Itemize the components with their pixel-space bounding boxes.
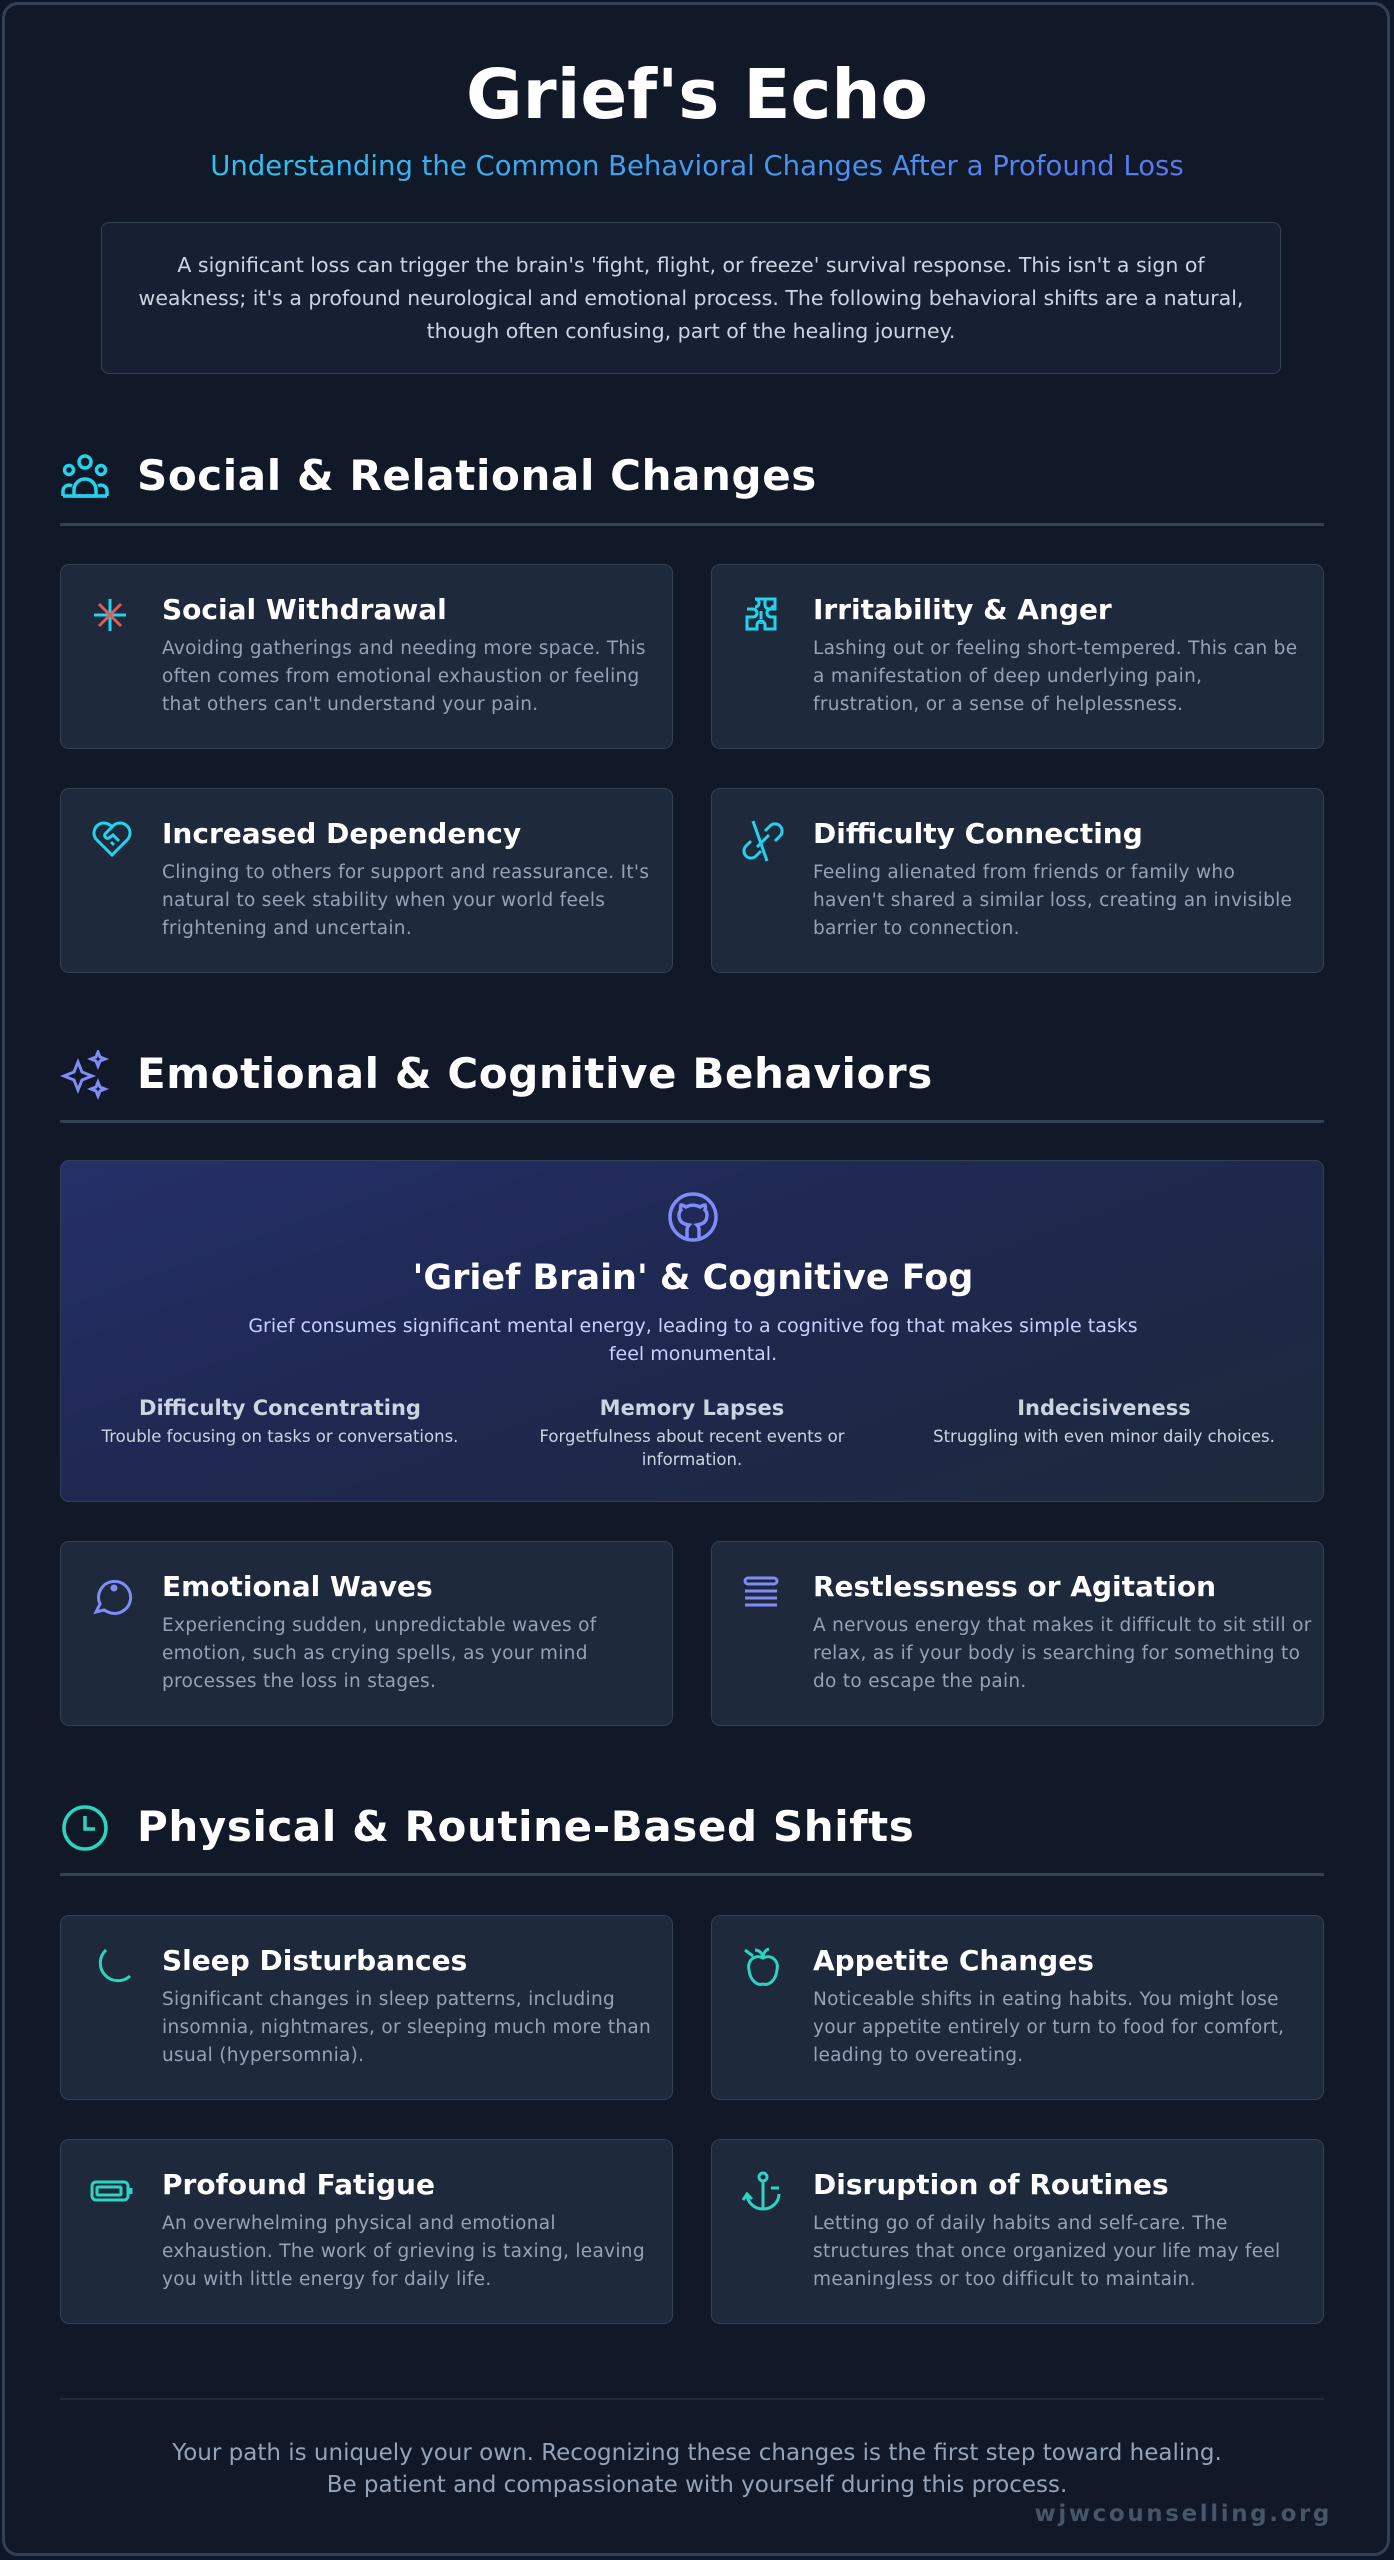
sub-point: indecisiveness: Indecisiveness: [1017, 1396, 1191, 1420]
card: irritability: frustration, or a sense of helplessness.: [813, 694, 1183, 715]
card: routines: Letting go of daily habits and self-care. The: [813, 2213, 1228, 2234]
card: social withdrawal: Avoiding gatherings and needing more space. This: [162, 638, 646, 659]
card: restlessness: relax, as if your body is searching for something to: [813, 1643, 1300, 1664]
card: appetite: leading to overeating.: [813, 2045, 1023, 2066]
icon: asterisk: [94, 599, 126, 631]
card: dependency: natural to seek stability when your world feels: [162, 890, 605, 911]
sub-point: concentrating: Difficulty Concentrating: [139, 1396, 421, 1420]
card: difficulty connecting: Feeling alienated from friends or family who: [813, 862, 1235, 883]
card: sleep: Significant changes in sleep patterns, including: [162, 1989, 615, 2010]
card: sleep: usual (hypersomnia).: [162, 2045, 364, 2066]
card: irritability: Irritability & Anger: [813, 593, 1112, 626]
icon: apple: [744, 1948, 779, 1986]
sub-point: memory: Memory Lapses: [600, 1396, 784, 1420]
card: dependency: Increased Dependency: [162, 817, 521, 850]
footer text: [172, 2440, 1222, 2498]
text: [248, 1315, 1138, 1365]
card: sleep: [60, 1915, 673, 2100]
card: difficulty connecting: haven't shared a similar loss, creating an invisible: [813, 890, 1292, 911]
panel: grief brain: [60, 1160, 1324, 1502]
card: dependency: [60, 788, 673, 973]
card: fatigue: An overwhelming physical and emotional: [162, 2213, 556, 2234]
card: irritability: [711, 564, 1324, 749]
subtitle: Understanding the Common Behavioral Changes After a Profound Loss: [210, 150, 1184, 182]
footer text: Your path is uniquely your own. Recognizing these changes is the first step toward healing.: [172, 2440, 1222, 2466]
icon: drop bubble: [93, 1580, 132, 1615]
card: appetite: your appetite entirely or turn to food for comfort,: [813, 2017, 1284, 2038]
sub-point: indecisiveness: [933, 1396, 1275, 1446]
icon: people: [61, 454, 109, 498]
title: Grief's Echo: [466, 55, 928, 135]
card: sleep: insomnia, nightmares, or sleeping much more than: [162, 2017, 651, 2038]
card: emotional waves: Emotional Waves: [162, 1570, 433, 1603]
section heading: physical: Physical & Routine-Based Shifts: [137, 1802, 914, 1851]
watermark: wjwcounselling.org: [1034, 2501, 1332, 2527]
card: routines: structures that once organized your life may feel: [813, 2241, 1280, 2262]
card: routines: meaningless or too difficult to maintain.: [813, 2269, 1196, 2290]
card: routines: [711, 2139, 1324, 2324]
icon: broken link: [742, 820, 784, 862]
card: emotional waves: processes the loss in stages.: [162, 1671, 436, 1692]
sub-point: concentrating: Trouble focusing on tasks or conversations.: [102, 1427, 458, 1446]
sub-point: concentrating: [102, 1396, 458, 1446]
card: irritability: Lashing out or feeling short-tempered. This can be: [813, 638, 1297, 659]
card: social withdrawal: that others can't understand your pain.: [162, 694, 538, 715]
section heading: social: Social & Relational Changes: [137, 451, 817, 500]
icon: battery: [90, 2180, 132, 2202]
card: routines: Disruption of Routines: [813, 2168, 1169, 2201]
card: appetite: Appetite Changes: [813, 1944, 1094, 1977]
card: appetite: [711, 1915, 1324, 2100]
card: difficulty connecting: barrier to connection.: [813, 918, 1020, 939]
card: fatigue: Profound Fatigue: [162, 2168, 435, 2201]
subtitle: [0, 148, 1394, 184]
card: appetite: Noticeable shifts in eating habits. You might lose: [813, 1989, 1279, 2010]
card: social withdrawal: [60, 564, 673, 749]
card: irritability: a manifestation of deep underlying pain,: [813, 666, 1202, 687]
card: restlessness: Restlessness or Agitation: [813, 1570, 1216, 1603]
card: difficulty connecting: Difficulty Connecting: [813, 817, 1143, 850]
sub-point: indecisiveness: Struggling with even minor daily choices.: [933, 1427, 1275, 1446]
card: restlessness: [711, 1541, 1324, 1726]
text: Grief consumes significant mental energy, leading to a cognitive fog that makes simple tasks: [248, 1315, 1138, 1337]
icon: github-like brain: [668, 1192, 718, 1242]
icon: puzzle: [746, 598, 776, 630]
card: restlessness: A nervous energy that makes it difficult to sit still or: [813, 1615, 1312, 1636]
intro text block: A significant loss can trigger the brain's 'fight, flight, or freeze' survival response. This isn't a sign of weakness; it's a profound neurological and emotional process. The following behavioral shifts are a natural, though often confusing, part of the healing journey.: [139, 253, 1243, 343]
card: sleep: Sleep Disturbances: [162, 1944, 467, 1977]
sub-point: memory: Forgetfulness about recent events or: [539, 1427, 845, 1446]
card: dependency: Clinging to others for support and reassurance. It's: [162, 862, 649, 883]
intro text block: [101, 222, 1281, 374]
section heading: emotional: Emotional & Cognitive Behaviors: [137, 1049, 933, 1098]
card: restlessness: do to escape the pain.: [813, 1671, 1027, 1692]
icon: sparkles: [60, 1050, 109, 1100]
icon: clock: [62, 1805, 108, 1851]
footer text: Be patient and compassionate with yourself during this process.: [327, 2472, 1067, 2498]
icon: moon: [98, 1948, 131, 1982]
text: feel monumental.: [609, 1343, 777, 1365]
icon: anchor: [742, 2172, 780, 2210]
icon: lines: [744, 1576, 778, 1606]
card: fatigue: you with little energy for daily life.: [162, 2269, 492, 2290]
card: social withdrawal: Social Withdrawal: [162, 593, 447, 626]
card: fatigue: exhaustion. The work of grieving is taxing, leaving: [162, 2241, 645, 2262]
card: difficulty connecting: [711, 788, 1324, 973]
icon: heart handshake: [92, 822, 132, 857]
card: emotional waves: emotion, such as crying spells, as your mind: [162, 1643, 588, 1664]
card: fatigue: [60, 2139, 673, 2324]
card: emotional waves: [60, 1541, 673, 1726]
card: dependency: frightening and uncertain.: [162, 918, 412, 939]
heading: 'Grief Brain' & Cognitive Fog: [413, 1258, 973, 1298]
card: social withdrawal: often comes from emotional exhaustion or feeling: [162, 666, 640, 687]
card: emotional waves: Experiencing sudden, unpredictable waves of: [162, 1615, 597, 1636]
sub-point: memory: information.: [642, 1450, 742, 1469]
sub-point: memory: [539, 1396, 845, 1469]
